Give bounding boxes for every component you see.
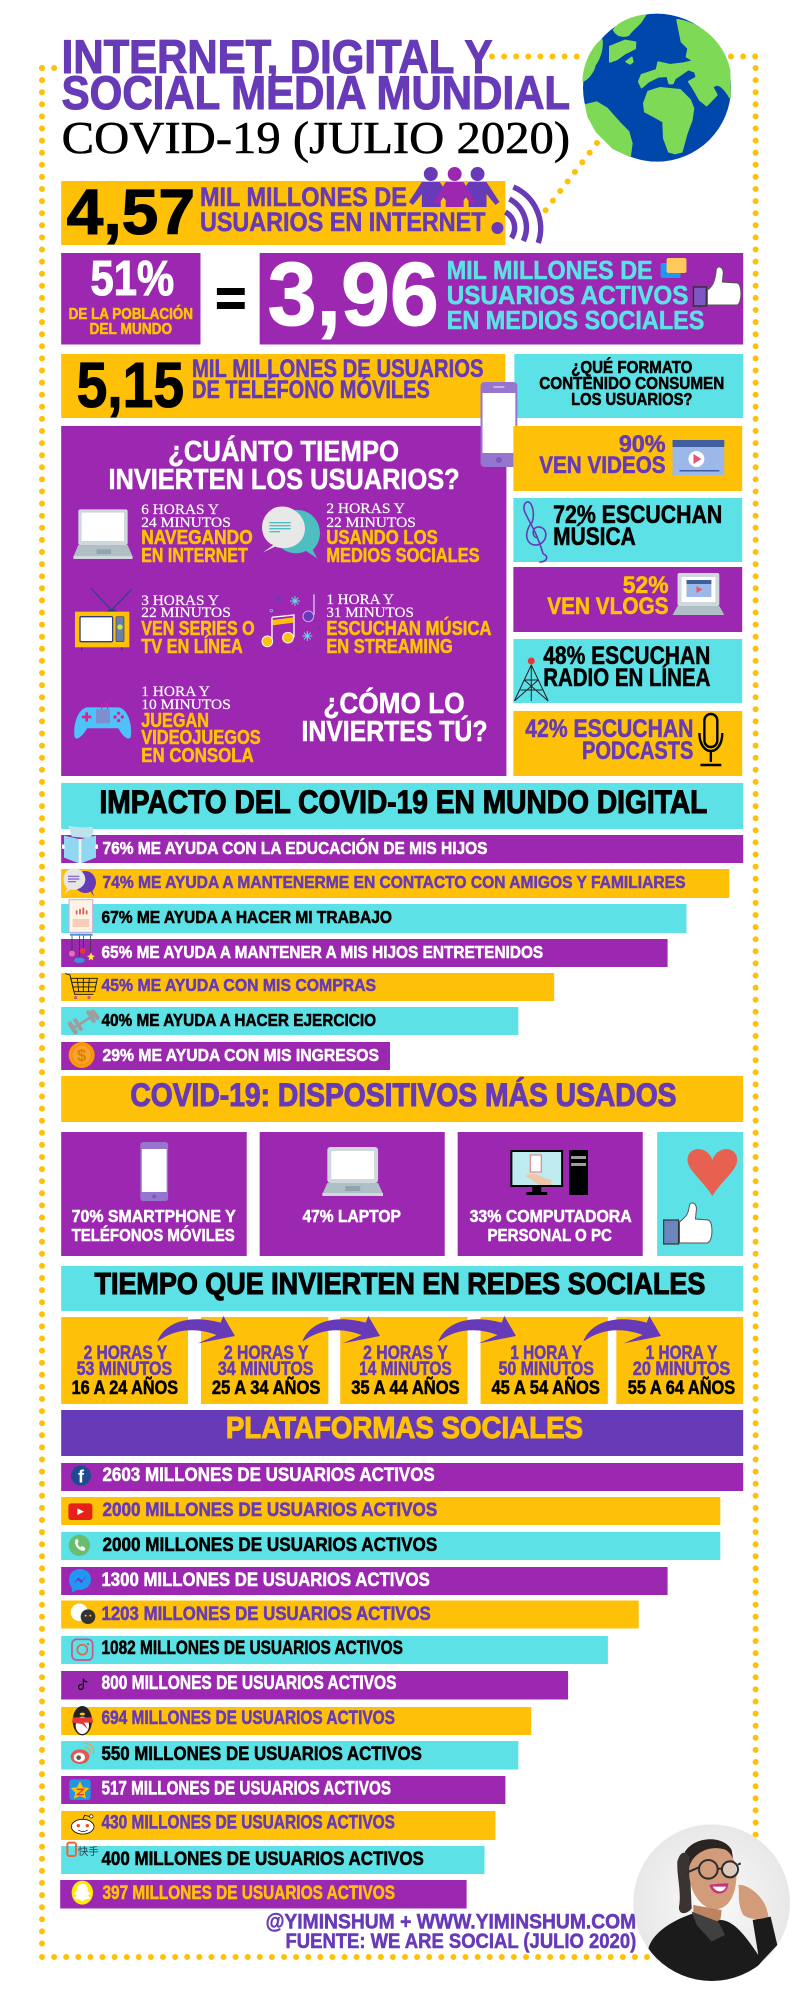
stat: video games: VIDEOJUEGOS: [141, 727, 261, 749]
card: computer: 33% COMPUTADORA: [470, 1206, 632, 1226]
icon: facebook: f: [78, 1467, 85, 1487]
bar: 65 percent: 65% ME AYUDA A MANTENER A MIS HIJOS ENTRETENIDOS: [101, 942, 543, 962]
panel: 52 percent vlogs: [513, 567, 742, 632]
photo: author portrait: [633, 1824, 790, 1983]
card: age 45 to 54: 1 HORA Y: [510, 1343, 582, 1364]
panel: social media users: USUARIOS ACTIVOS: [447, 282, 688, 310]
bar: 40 percent: [61, 1007, 518, 1035]
card: age 25 to 34: 25 A 34 AÑOS: [212, 1377, 320, 1399]
panel: social media users: 3,96: [268, 245, 439, 345]
bar: wechat: [61, 1600, 639, 1628]
panel: 90 percent videos: [513, 426, 742, 491]
bar: 67 percent: 67% ME AYUDA A HACER MI TRABAJO: [101, 907, 392, 927]
stat: tv series: 22 MINUTOS: [141, 605, 231, 621]
heading: social platforms: PLATAFORMAS SOCIALES: [226, 1410, 583, 1445]
card: age 35 to 44: 2 HORAS Y: [363, 1343, 448, 1364]
icon: qzone: [69, 1779, 91, 1800]
stat: social media: [326, 501, 480, 567]
panel: 42 percent podcasts: [513, 711, 742, 776]
callout: how do you spend it: INVIERTES TÚ?: [301, 714, 488, 748]
panel: internet users: 4,57: [67, 176, 195, 248]
icon: chat bubbles: [661, 258, 686, 278]
bar: kuaishou: [61, 1846, 485, 1874]
icon: snapchat: [72, 1881, 93, 1905]
bar: instagram: [61, 1636, 608, 1664]
icon: television: [75, 588, 132, 651]
bar: reddit: 430 MILLONES DE USUARIOS ACTIVOS: [101, 1812, 395, 1834]
stat: browsing internet: EN INTERNET: [141, 545, 248, 567]
card: age 55 to 64: 1 HORA Y: [646, 1343, 718, 1364]
icon: laptop with video: [673, 573, 724, 615]
panel: social media users: EN MEDIOS SOCIALES: [447, 307, 704, 335]
card: age 16 to 24: 2 HORAS Y: [84, 1343, 167, 1364]
icon: phone: [140, 1142, 168, 1201]
panel: 42 percent podcasts: PODCASTS: [582, 737, 693, 765]
bar: 29 percent: 29% ME AYUDA CON MIS INGRESOS: [102, 1045, 379, 1065]
bar: wechat: 1203 MILLONES DE USUARIOS ACTIVOS: [101, 1604, 431, 1625]
bar: weibo: 550 MILLONES DE USUARIOS ACTIVOS: [101, 1744, 422, 1765]
card: age 16 to 24: 53 MINUTOS: [77, 1359, 172, 1380]
title: [62, 31, 570, 163]
stat: music streaming: EN STREAMING: [326, 636, 453, 658]
footer credits: [266, 1910, 636, 1953]
card: age 55 to 64: [616, 1317, 743, 1404]
stat: social media: 2 HORAS Y: [326, 501, 405, 517]
card: smartphone: [61, 1132, 247, 1256]
icon: dollar coin: $: [77, 1046, 87, 1065]
icon: thumbs up: [664, 1203, 712, 1244]
card: computer: [458, 1132, 643, 1256]
heading: social platforms: [61, 1410, 743, 1456]
panel: social media users: MIL MILLONES DE: [447, 257, 653, 285]
footer credits: @YIMINSHUM + WWW.YIMINSHUM.COM: [266, 1910, 636, 1934]
arrow: age 16 to 25: [157, 1316, 235, 1343]
title: SOCIAL MEDIA MUNDIAL: [62, 67, 570, 119]
bar: 74 percent: 74% ME AYUDA A MANTENERME EN CONTACTO CON AMIGOS Y FAMILIARES: [102, 872, 686, 892]
bar: 74 percent: [61, 869, 729, 898]
arrow: age 25 to 35: [302, 1316, 380, 1343]
icon: wifi signal: [491, 187, 541, 243]
icon: desktop computer: [510, 1150, 588, 1195]
stat: browsing internet: NAVEGANDO: [141, 527, 253, 549]
icon: people: [409, 167, 499, 207]
panel: mobile users: MIL MILLONES DE USUARIOS: [192, 355, 484, 383]
card: smartphone: TELÉFONOS MÓVILES: [72, 1224, 235, 1245]
bar: kuaishou: 400 MILLONES DE USUARIOS ACTIVOS: [101, 1849, 424, 1870]
bar: qq: [61, 1707, 531, 1735]
icon: speech bubbles: [262, 507, 320, 558]
card: age 35 to 44: 35 A 44 AÑOS: [351, 1377, 460, 1399]
footer credits: FUENTE: WE ARE SOCIAL (JULIO 2020): [286, 1930, 636, 1953]
card: age 25 to 34: 2 HORAS Y: [224, 1343, 309, 1364]
heading: how much time: ¿CUÁNTO TIEMPO: [168, 434, 399, 468]
bar: qzone: [61, 1776, 505, 1804]
stat: browsing internet: 24 MINUTOS: [141, 515, 231, 531]
card: computer: PERSONAL O PC: [488, 1225, 612, 1245]
icon: kuaishou: [67, 1843, 99, 1858]
stat: tv series: 3 HORAS Y: [141, 593, 219, 609]
bar: 40 percent: 40% ME AYUDA A HACER EJERCICIO: [101, 1010, 376, 1030]
card: age 55 to 64: 20 MINUTOS: [633, 1359, 730, 1380]
bar: 45 percent: [61, 973, 554, 1001]
icon: messenger: [69, 1569, 91, 1593]
bar: 76 percent: 76% ME AYUDA CON LA EDUCACIÓN DE MIS HIJOS: [102, 837, 488, 858]
stat: music streaming: ESCUCHAN MÚSICA: [326, 616, 491, 640]
icon: qq penguin: [72, 1706, 93, 1735]
bar: reddit: [61, 1811, 495, 1840]
heading: time on social: TIEMPO QUE INVIERTEN EN REDES SOCIALES: [95, 1266, 705, 1301]
icon: instagram: [72, 1639, 93, 1660]
icon: wechat: [71, 1604, 95, 1624]
heading: how much time: [108, 434, 460, 496]
bar: instagram: 1082 MILLONES DE USUARIOS ACTIVOS: [101, 1638, 403, 1659]
card: age 45 to 54: 50 MINUTOS: [498, 1359, 594, 1380]
icon: radio tower: [514, 658, 548, 701]
panel: 48 percent radio: 48% ESCUCHAN: [543, 642, 710, 670]
callout: how do you spend it: [301, 686, 488, 748]
stat: video games: EN CONSOLA: [141, 745, 254, 767]
panel: 51 percent: 51%: [91, 252, 174, 306]
stat: video games: JUEGAN: [141, 710, 209, 732]
bar: whatsapp: [61, 1532, 720, 1560]
card: reactions: [657, 1132, 743, 1256]
bar: 29 percent: [61, 1042, 390, 1070]
bar: tiktok: 800 MILLONES DE USUARIOS ACTIVOS: [101, 1673, 396, 1694]
icon: dollar coin: [69, 1042, 95, 1068]
equals sign: [217, 288, 245, 309]
bar: 76 percent: [61, 835, 743, 863]
bar: youtube: 2000 MILLONES DE USUARIOS ACTIVOS: [102, 1500, 437, 1521]
icon: heart: [687, 1149, 737, 1196]
title: COVID-19 (JULIO 2020): [62, 112, 570, 163]
panel: mobile users: [61, 349, 505, 421]
bar chart: platforms: [60, 1463, 743, 1908]
card: age 35 to 44: 14 MINUTOS: [359, 1359, 452, 1380]
card: age 35 to 44: [340, 1317, 468, 1404]
bar: qzone: 517 MILLONES DE USUARIOS ACTIVOS: [101, 1778, 391, 1800]
icon: youtube: [68, 1503, 92, 1520]
icon: music notes: [262, 594, 322, 651]
bar: messenger: [61, 1567, 668, 1595]
icon: shopping cart: [65, 974, 97, 999]
panel: mobile users: DE TELÉFONO MÓVILES: [192, 374, 430, 404]
card: age 16 to 24: [61, 1317, 188, 1404]
stat: browsing internet: [141, 502, 253, 567]
icon: thumbs up: [693, 267, 741, 306]
panel: format question: [514, 354, 743, 418]
title: INTERNET, DIGITAL Y: [62, 31, 492, 83]
icon: video player: [673, 440, 724, 475]
stat: tv series: TV EN LÍNEA: [141, 635, 243, 658]
bar: 67 percent: [61, 904, 686, 933]
callout: how do you spend it: ¿CÓMO LO: [323, 686, 465, 720]
panel: internet users: [61, 167, 541, 248]
panel: 51 percent: DE LA POBLACIÓN: [69, 304, 193, 323]
icon: tiktok: [73, 1675, 91, 1693]
icon: treble clef: [524, 502, 547, 562]
panel: internet users: USUARIOS EN INTERNET: [200, 207, 486, 237]
bar chart: impact: [61, 835, 743, 1070]
stat: social media: USANDO LOS: [326, 527, 438, 549]
panel: 72 percent music: [513, 498, 742, 562]
icon: hanging toys: [69, 934, 95, 963]
bar: facebook: 2603 MILLONES DE USUARIOS ACTIVOS: [102, 1465, 435, 1486]
panel: 42 percent podcasts: 42% ESCUCHAN: [525, 715, 693, 743]
heading: how much time: INVIERTEN LOS USUARIOS?: [108, 464, 460, 496]
card: age 45 to 54: [481, 1317, 608, 1404]
panel: 51 percent: DEL MUNDO: [90, 321, 172, 338]
arrow: age 45 to 55: [583, 1316, 661, 1343]
icon: globe: [583, 14, 731, 162]
panel: format question: CONTENIDO CONSUMEN: [539, 373, 724, 393]
card: age 55 to 64: 55 A 64 AÑOS: [628, 1377, 735, 1399]
icon: open book: [62, 826, 98, 863]
bar: 65 percent: [61, 939, 668, 967]
icon: facebook: [71, 1466, 91, 1487]
icon: weibo: [71, 1743, 94, 1764]
panel: 90 percent videos: VEN VIDEOS: [539, 452, 666, 479]
icon: dumbbell: [70, 1012, 97, 1032]
icon: laptop: [322, 1147, 383, 1196]
card: age 25 to 34: [201, 1317, 328, 1404]
bar: qq: 694 MILLONES DE USUARIOS ACTIVOS: [101, 1708, 395, 1729]
panel: 90 percent videos: 90%: [619, 431, 666, 458]
bar: youtube: [61, 1497, 720, 1525]
bar: tiktok: [61, 1671, 568, 1700]
panel: 72 percent music: 72% ESCUCHAN: [553, 501, 722, 529]
panel: social media users: [260, 245, 743, 345]
card: age 45 to 54: 45 A 54 AÑOS: [491, 1377, 600, 1399]
card: smartphone: 70% SMARTPHONE Y: [72, 1206, 236, 1226]
stat: music streaming: 31 MINUTOS: [326, 605, 414, 621]
stat: music streaming: 1 HORA Y: [326, 592, 394, 608]
icon: reddit: [71, 1815, 94, 1834]
panel: 52 percent vlogs: VEN VLOGS: [547, 593, 669, 620]
card: age 25 to 34: 34 MINUTOS: [218, 1359, 313, 1380]
icon: microphone: [699, 714, 722, 765]
panel: format question: LOS USUARIOS?: [571, 389, 692, 409]
stat: video games: 1 HORA Y: [141, 684, 210, 700]
bar: snapchat: 397 MILLONES DE USUARIOS ACTIVOS: [102, 1883, 395, 1904]
panel: 48 percent radio: RADIO EN LÍNEA: [543, 663, 710, 692]
heading: devices: COVID-19: DISPOSITIVOS MÁS USADOS: [130, 1077, 677, 1113]
bar: 45 percent: 45% ME AYUDA CON MIS COMPRAS: [101, 975, 376, 995]
stat: social media: 22 MINUTOS: [326, 515, 416, 531]
panel: time spent: [61, 426, 506, 776]
icon: chat: [64, 868, 96, 897]
icon: game controller: [74, 704, 131, 739]
panel: mobile users: 5,15: [77, 349, 184, 421]
stat: video games: [141, 684, 261, 767]
icon: laptop navigating: [73, 509, 133, 559]
bar: snapchat: [60, 1880, 467, 1908]
card: laptop: 47% LAPTOP: [302, 1206, 401, 1226]
bar: whatsapp: 2000 MILLONES DE USUARIOS ACTIVOS: [102, 1535, 437, 1556]
icon: kuaishou: 快手: [78, 1845, 99, 1858]
panel: internet users: MIL MILLONES DE: [200, 182, 407, 212]
stat: tv series: VEN SERIES O: [141, 618, 255, 640]
heading: covid impact: IMPACTO DEL COVID-19 EN MUNDO DIGITAL: [99, 784, 707, 820]
icon: whatsapp: [69, 1535, 90, 1556]
stat: music streaming: [326, 592, 491, 658]
stat: social media: MEDIOS SOCIALES: [326, 545, 480, 567]
panel: format question: ¿QUÉ FORMATO: [571, 356, 692, 377]
stat: video games: 10 MINUTOS: [141, 697, 231, 713]
card: age 16 to 24: 16 A 24 AÑOS: [72, 1377, 178, 1399]
panel: 51 percent: [61, 252, 200, 344]
panel: 72 percent music: MÚSICA: [553, 521, 636, 551]
stat: browsing internet: 6 HORAS Y: [141, 502, 219, 518]
stat: tv series: [141, 593, 255, 658]
arrow: age 35 to 45: [438, 1316, 516, 1343]
bar: messenger: 1300 MILLONES DE USUARIOS ACTIVOS: [101, 1570, 430, 1591]
panel: 48 percent radio: [513, 639, 742, 703]
icon: clipboard: [69, 900, 93, 932]
bar: facebook: [61, 1463, 743, 1491]
card: laptop: [260, 1132, 445, 1256]
icon: smartphone: [481, 382, 517, 467]
bar: weibo: [61, 1741, 518, 1770]
panel: 52 percent vlogs: 52%: [623, 572, 669, 599]
